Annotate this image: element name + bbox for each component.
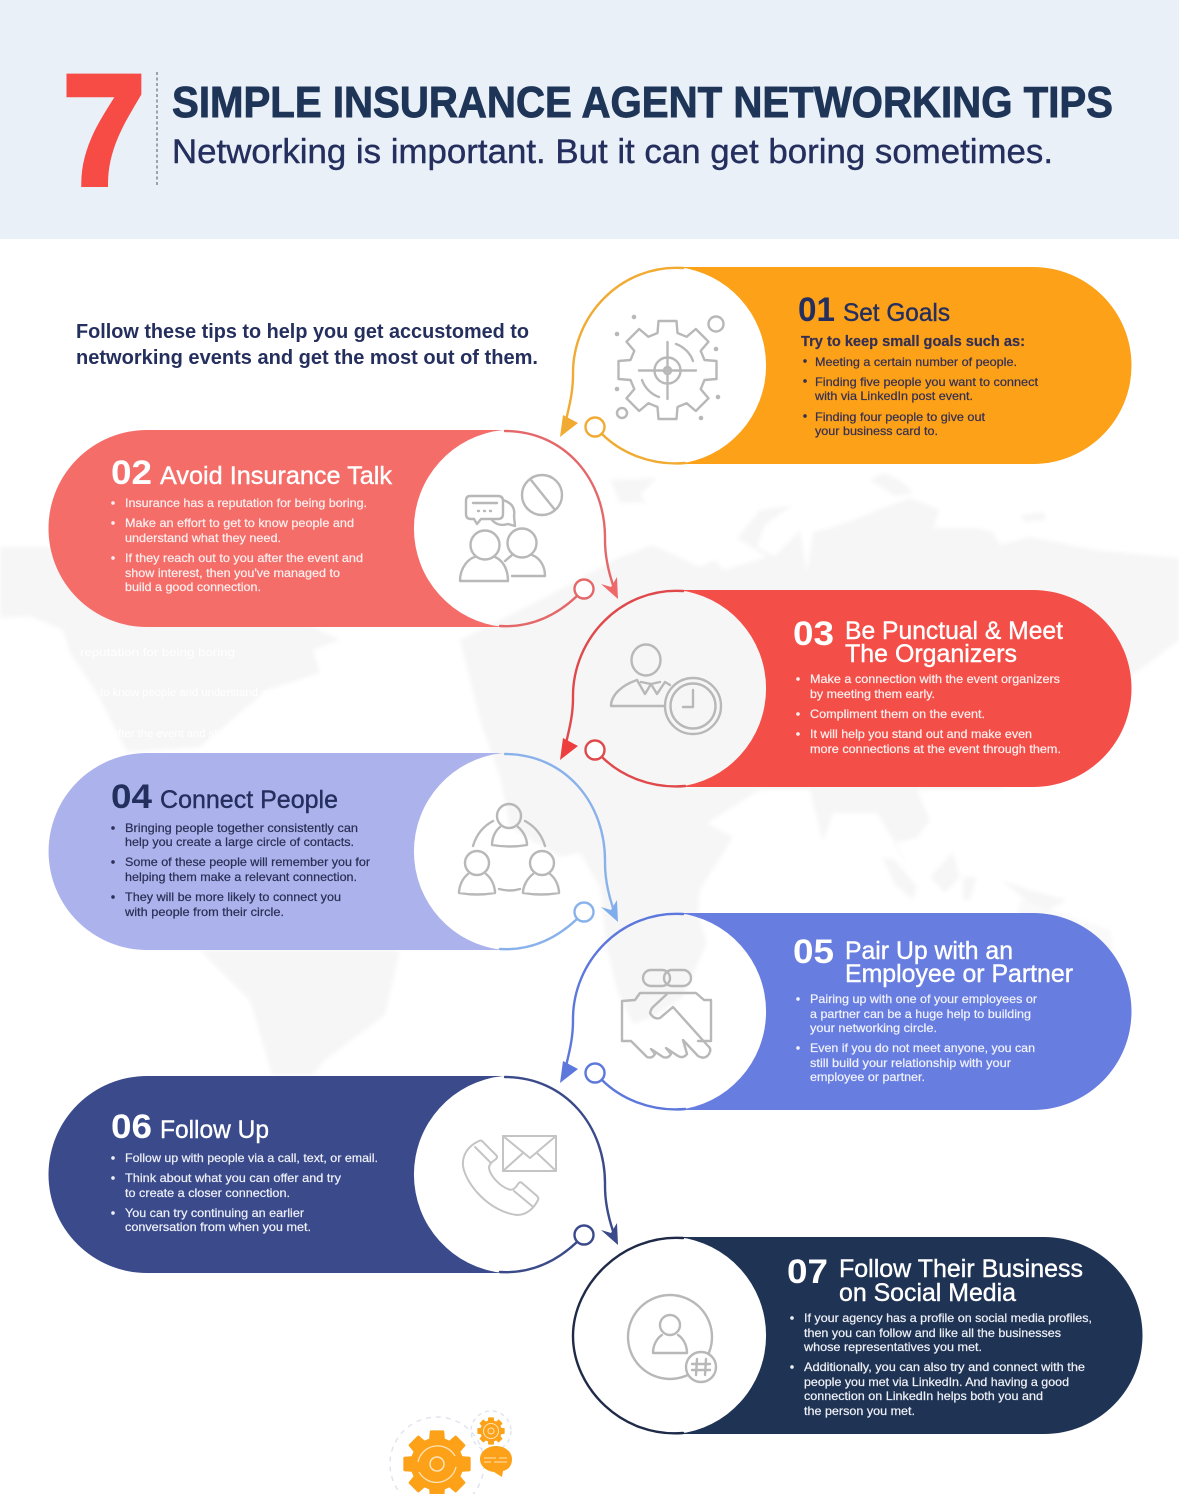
- number and title 02: 02: [111, 454, 152, 492]
- text block 01: Meeting a certain number of people.: [815, 355, 1017, 369]
- intro text: [76, 321, 538, 369]
- number and title 03: The Organizers: [845, 640, 1017, 668]
- number and title 04: [111, 778, 338, 816]
- text block 07: connection on LinkedIn helps both you and: [804, 1389, 1043, 1403]
- number and title 05: Employee or Partner: [845, 960, 1073, 988]
- text block 07: people you met via LinkedIn. And having a good: [804, 1375, 1069, 1389]
- text block 03: by meeting them early.: [810, 687, 935, 701]
- text block 04: They will be more likely to connect you: [125, 890, 341, 904]
- number and title 02: Avoid Insurance Talk: [160, 462, 392, 490]
- text block 06: Think about what you can offer and try: [125, 1171, 341, 1185]
- text block 04: Bringing people together consistently can: [125, 821, 358, 835]
- number and title 05: [793, 933, 1073, 988]
- text block 02: build a good connection.: [125, 580, 261, 594]
- text block 02: If they reach out to you after the event and: [125, 551, 363, 565]
- arrow connector 04: [500, 754, 618, 949]
- text block 04: with people from their circle.: [124, 905, 284, 919]
- text block 02: understand what they need.: [125, 531, 281, 545]
- text block 04: Some of these people will remember you for: [125, 855, 370, 869]
- text block 07: If your agency has a profile on social media profiles,: [804, 1311, 1092, 1325]
- ghost text over map: [80, 647, 285, 740]
- text block 05: still build your relationship with your: [810, 1056, 1011, 1070]
- title: SIMPLE INSURANCE AGENT NETWORKING TIPS: [172, 78, 1113, 127]
- text block 03: more connections at the event through them.: [810, 742, 1061, 756]
- text block 06: Follow up with people via a call, text, or email.: [125, 1151, 378, 1165]
- text block 06: conversation from when you met.: [125, 1220, 311, 1234]
- icon: person and clock: [611, 644, 721, 734]
- text block 03: It will help you stand out and make even: [810, 727, 1032, 741]
- arrow connector 02: [500, 431, 618, 626]
- number and title 06: Follow Up: [160, 1116, 269, 1144]
- circle outline 07: [573, 1238, 683, 1433]
- number and title 07: on Social Media: [839, 1279, 1016, 1307]
- text block 04: helping them make a relevant connection.: [125, 870, 357, 884]
- number and title 05: Pair Up with an: [845, 937, 1013, 965]
- text block 05: your networking circle.: [810, 1021, 937, 1035]
- panel: tip 03 be punctual: [560, 590, 1132, 787]
- text block 07: whose representatives you met.: [803, 1340, 982, 1354]
- text block 05: [796, 992, 1037, 1084]
- number and title 03: 03: [793, 615, 834, 653]
- number and title 03: Be Punctual & Meet: [845, 617, 1063, 645]
- text block 01: Try to keep small goals such as:: [801, 333, 1025, 350]
- subtitle: Networking is important. But it can get boring sometimes.: [172, 133, 1053, 171]
- number and title 07: 07: [787, 1253, 828, 1291]
- arrow connector 06: [500, 1077, 618, 1272]
- number and title 01: Set Goals: [843, 299, 950, 327]
- text block 02: [111, 496, 367, 594]
- icon: handshake and chain: [622, 970, 711, 1058]
- text block 02: Make an effort to get to know people and: [125, 516, 354, 530]
- text block 07: [790, 1311, 1092, 1418]
- text block 03: [796, 672, 1061, 756]
- number and title 04: Connect People: [160, 786, 338, 814]
- number and title 05: 05: [793, 933, 834, 971]
- text block 04: help you create a large circle of contacts.: [125, 835, 354, 849]
- arrow connector 05: [560, 914, 685, 1109]
- text block 01: [801, 333, 1039, 438]
- text block 07: Additionally, you can also try and connect with the: [804, 1360, 1085, 1374]
- icon: footer gears and speech bubble: [390, 1411, 512, 1494]
- panel: tip 05 pair up: [560, 913, 1132, 1110]
- text block 05: Even if you do not meet anyone, you can: [810, 1041, 1035, 1055]
- icon: gear target: [615, 315, 724, 420]
- number and title 01: 01: [798, 291, 835, 329]
- panel: tip 06 follow up: [48, 1076, 618, 1273]
- text block 07: then you can follow and like all the businesses: [804, 1326, 1061, 1340]
- panel: tip 01 set goals: [560, 267, 1132, 464]
- text block 06: to create a closer connection.: [125, 1186, 290, 1200]
- panel: tip 04 connect people: [49, 753, 618, 950]
- big number 7: 7: [63, 44, 145, 218]
- panel: tip 02 avoid insurance talk: [48, 430, 618, 627]
- text block 01: Finding four people to give out: [815, 410, 986, 424]
- text block 01: your business card to.: [815, 424, 938, 438]
- text block 01: Finding five people you want to connect: [815, 375, 1039, 389]
- number and title 01: [798, 291, 950, 329]
- text block 05: Pairing up with one of your employees or: [810, 992, 1037, 1006]
- text block 01: with via LinkedIn post event.: [814, 389, 973, 403]
- text block 06: [111, 1151, 378, 1234]
- ghost text over map: reputation for being boring: [80, 647, 235, 659]
- intro text: Follow these tips to help you get accustomed to: [76, 321, 529, 343]
- header band: [0, 0, 1179, 239]
- icon: phone and envelope: [463, 1136, 556, 1215]
- number and title 02: [111, 454, 392, 492]
- text block 07: the person you met.: [804, 1404, 915, 1418]
- arrow connector 03: [560, 591, 685, 786]
- icon: profile and hashtag: [628, 1295, 716, 1382]
- number and title 04: 04: [111, 778, 152, 816]
- number and title 03: [793, 615, 1063, 668]
- text block 02: Insurance has a reputation for being boring.: [125, 496, 367, 510]
- world map background: [0, 473, 1179, 1075]
- number and title 07: Follow Their Business: [839, 1255, 1083, 1283]
- intro text: networking events and get the most out of them.: [76, 347, 538, 369]
- panel: tip 07 social media: [573, 1237, 1142, 1434]
- text block 02: show interest, then you've managed to: [125, 566, 340, 580]
- ghost text over map: to know people and understand what: [100, 687, 285, 699]
- text block 04: [111, 821, 370, 919]
- number and title 07: [787, 1253, 1083, 1307]
- text block 05: employee or partner.: [810, 1070, 925, 1084]
- text block 06: You can try continuing an earlier: [125, 1206, 304, 1220]
- icon: talk and prohibited: [460, 475, 562, 581]
- text block 03: Compliment them on the event.: [810, 707, 985, 721]
- arrow connector 01: [560, 268, 685, 463]
- ghost text over map: after the event and show: [112, 728, 235, 740]
- text block 05: a partner can be a huge help to building: [810, 1007, 1031, 1021]
- number and title 06: [111, 1108, 269, 1146]
- icon: connected people: [459, 804, 559, 894]
- number and title 06: 06: [111, 1108, 152, 1146]
- text block 03: Make a connection with the event organizers: [810, 672, 1060, 686]
